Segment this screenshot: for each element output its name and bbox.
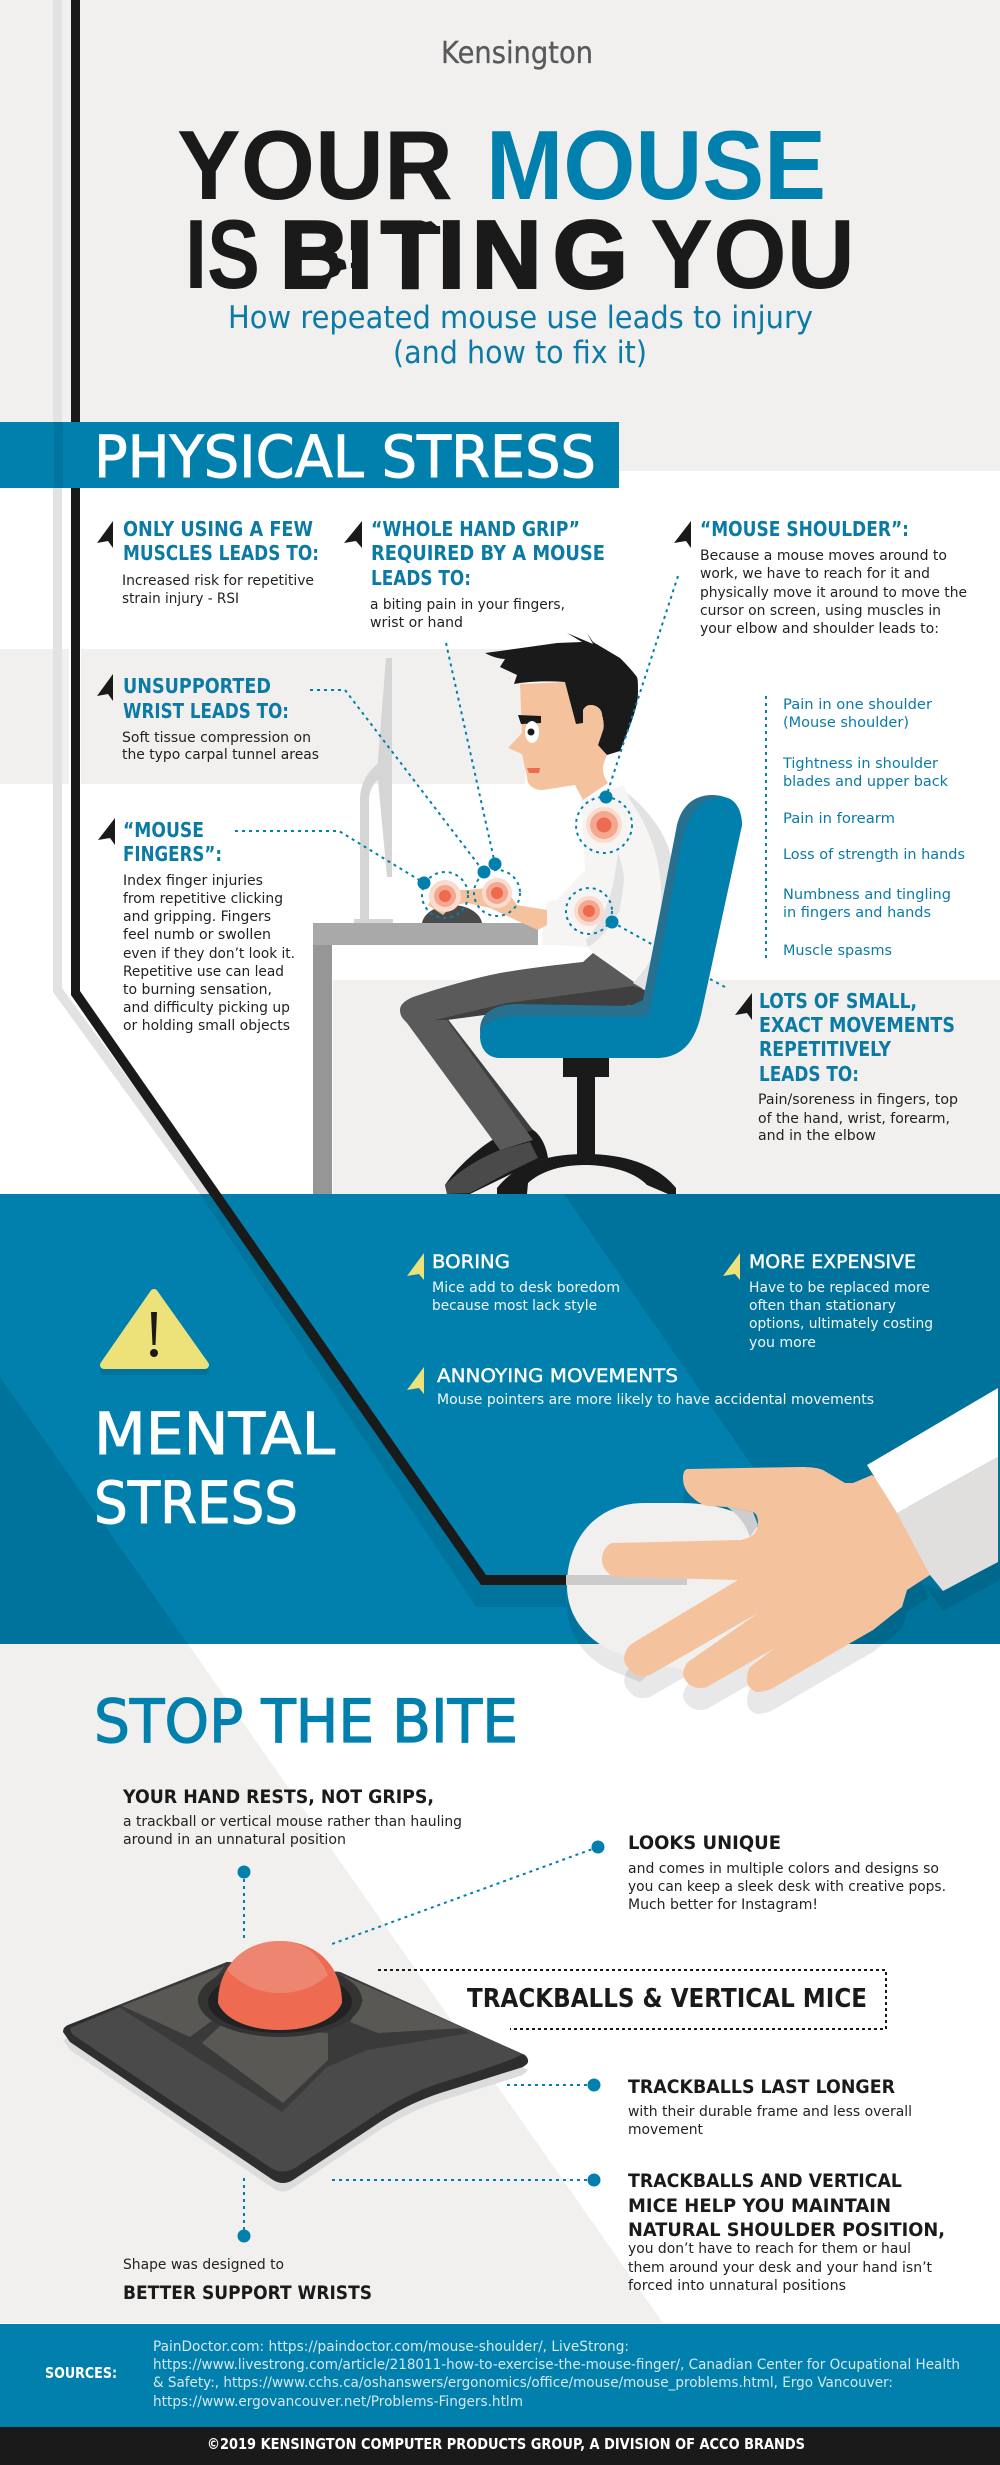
dotted box heading: trackballs and vertical mice: TRACKBALLS & VERTICAL MICE [467,1984,867,2014]
title [177,110,855,309]
note: better support wrists: BETTER SUPPORT WRISTS [123,2282,372,2304]
callout: mouse fingers [98,818,295,1034]
grey accent line [53,0,213,1194]
callout connector lines [235,576,766,987]
callout: only using a few muscles: Increased risk for repetitive [122,573,314,589]
sources panel: https://www.ergovancouver.net/Problems-Fingers.htlm [153,2394,523,2410]
note: natural shoulder position: you don’t have to reach for them or haul [628,2241,911,2257]
note: hand rests: a trackball or vertical mouse rather than hauling [123,1814,462,1830]
connector: looks unique [332,1840,604,1944]
item: boring: BORING [432,1251,510,1273]
callout: only using a few muscles: ONLY USING A FEW [123,517,313,541]
callout: lots of small movements: EXACT MOVEMENTS [759,1013,955,1037]
connector: trackballs last longer [505,2078,600,2092]
mental stress panel background [0,1194,1000,1644]
title: IS [185,199,260,309]
sleeve [867,1388,998,1513]
callout: mouse fingers: Index finger injuries [123,873,263,889]
callout: mouse fingers: and gripping. Fingers [123,909,271,925]
callout: mouse shoulder: cursor on screen, using muscles in [700,603,941,619]
grey band behind chair [333,980,1000,1194]
callout: mouse fingers: feel numb or swollen [123,927,271,943]
symptom list: blades and upper back [783,774,949,790]
seated person [400,633,672,1194]
sources panel: https://www.livestrong.com/article/218011-how-to-exercise-the-mouse-finger/, Canadian Center for Ocupational Health [153,2357,960,2373]
callout: mouse shoulder: work, we have to reach for it and [700,566,930,582]
callout: whole hand grip: REQUIRED BY A MOUSE [371,541,605,565]
callout: mouse fingers: even if they don’t look it. [123,946,295,962]
callout: mouse shoulder [674,517,967,637]
symptom list: Pain in one shoulder [783,697,932,713]
note: trackballs last longer: with their durable frame and less overall [628,2104,912,2120]
logo: Kensington: Kensington [441,36,593,71]
note: hand rests [122,1786,462,1848]
callout: mouse fingers: from repetitive clicking [123,891,283,907]
computer mouse [567,1503,790,1672]
item: more expensive: often than stationary [749,1298,896,1314]
footer [0,2427,1000,2465]
desk [313,923,538,1194]
note: better support wrists: Shape was designed to [123,2257,284,2273]
item: more expensive [723,1251,933,1351]
callout: unsupported wrist: Soft tissue compression on [122,730,311,746]
mouse on desk [422,905,482,923]
hand [602,1467,945,1692]
sources panel: PainDoctor.com: https://paindoctor.com/mouse-shoulder/, LiveStrong: [153,2339,629,2355]
pain points [422,797,632,934]
banner: physical stress: PHYSICAL STRESS [94,423,596,491]
illustration: trackball [63,1941,528,2192]
item: more expensive: Have to be replaced more [749,1280,930,1296]
item: annoying movements: Mouse pointers are more likely to have accidental movements [437,1392,874,1408]
shirt [542,785,672,990]
symptom list: (Mouse shoulder) [783,715,909,731]
callout: only using a few muscles: MUSCLES LEADS TO: [123,541,319,565]
subtitle: How repeated mouse use leads to injury [228,300,813,336]
note: trackballs last longer [628,2076,912,2138]
callout: unsupported wrist [97,674,319,763]
symptom list: Numbness and tingling [783,887,951,903]
symptom list: in fingers and hands [783,905,931,921]
note: natural shoulder position: them around your desk and your hand isn’t [628,2260,933,2276]
callout: unsupported wrist: the typo carpal tunnel areas [122,747,319,763]
monitor [354,658,393,923]
sources panel: SOURCES: [45,2364,117,2382]
callout: mouse fingers: Repetitive use can lead [123,964,284,980]
callout: mouse shoulder: “MOUSE SHOULDER”: [700,517,909,541]
black guide line [71,0,566,1585]
callout: mouse fingers: or holding small objects [123,1018,290,1034]
sources panel: & Safety:, https://www.cchs.ca/oshanswers/ergonomics/office/mouse/mouse_problems.html, Ergo Vancouver: [153,2375,893,2391]
heading: mental stress: STRESS [94,1469,298,1537]
legs [445,1128,548,1194]
note: natural shoulder position: NATURAL SHOULDER POSITION, [628,2219,945,2241]
heading: mental stress [94,1400,335,1537]
callout: whole hand grip: “WHOLE HAND GRIP” [371,517,580,541]
callout: mouse shoulder: Because a mouse moves around to [700,548,947,564]
callout: lots of small movements: Pain/soreness in fingers, top [758,1092,958,1108]
chair cushion [480,795,742,1058]
subtitle [228,300,813,371]
callout: mouse shoulder: your elbow and shoulder leads to: [700,621,939,637]
shadows [567,1523,760,1682]
note: trackballs last longer: movement [628,2122,704,2138]
grey band behind monitor [0,649,525,784]
heading: stop the bite: STOP THE BITE [94,1687,518,1757]
callout: lots of small movements [735,989,958,1144]
illustration: hand on mouse [566,1388,1000,1714]
callout: lots of small movements: and in the elbow [758,1128,876,1144]
callout: mouse fingers: and difficulty picking up [123,1000,290,1016]
callout: only using a few muscles: strain injury - RSI [122,591,239,607]
note: natural shoulder position [628,2170,945,2294]
callout: mouse fingers: FINGERS”: [123,842,222,866]
stop section background wedge [0,1644,663,2323]
callout: lots of small movements: LOTS OF SMALL, [759,989,917,1013]
note: better support wrists [123,2257,372,2304]
callout: lots of small movements: of the hand, wrist, forearm, [758,1111,950,1127]
note: natural shoulder position: MICE HELP YOU MAINTAIN [628,2195,891,2217]
title: BITING [280,202,628,308]
callout: unsupported wrist: WRIST LEADS TO: [123,699,289,723]
footer: ©2019 KENSINGTON COMPUTER PRODUCTS GROUP, A DIVISION OF ACCO BRANDS [207,2435,805,2453]
title: MOUSE [486,110,826,220]
icon: warning triangle [104,1293,205,1371]
item: more expensive: you more [749,1335,816,1351]
callout: whole hand grip [344,517,605,631]
arm and hand [428,888,547,930]
callout: only using a few muscles [97,517,319,607]
item: annoying movements [407,1365,874,1408]
note: natural shoulder position: forced into unnatural positions [628,2278,846,2294]
callout: whole hand grip: a biting pain in your fingers, [370,597,565,613]
dotted box heading: trackballs and vertical mice [378,1970,886,2029]
head [508,682,608,800]
callout: whole hand grip: LEADS TO: [371,566,471,590]
note: hand rests: YOUR HAND RESTS, NOT GRIPS, [122,1786,434,1808]
item: more expensive: MORE EXPENSIVE [749,1251,916,1273]
symptom list: Pain in forearm [783,811,895,827]
symptom list: Loss of strength in hands [783,847,965,863]
chair [497,1058,676,1194]
connector: hand rests [238,1866,250,1942]
item: more expensive: options, ultimately costing [749,1316,933,1332]
callout dots [418,790,618,928]
callout: whole hand grip: wrist or hand [370,615,463,631]
note: looks unique: and comes in multiple colors and designs so [628,1861,939,1877]
callout: lots of small movements: LEADS TO: [759,1062,859,1086]
callout: unsupported wrist: UNSUPPORTED [123,674,271,698]
symptom list: Muscle spasms [783,943,892,959]
callout: mouse fingers: “MOUSE [123,818,204,842]
note: hand rests: around in an unnatural position [123,1832,346,1848]
symptom list [782,697,965,959]
item: annoying movements: ANNOYING MOVEMENTS [437,1365,678,1387]
note: looks unique: Much better for Instagram! [628,1897,818,1913]
callout: mouse shoulder: physically move it around to move the [700,585,967,601]
item: boring [407,1251,620,1314]
note: natural shoulder position: TRACKBALLS AND VERTICAL [628,2170,902,2192]
note: trackballs last longer: TRACKBALLS LAST LONGER [628,2076,895,2098]
title: YOUR [177,110,453,220]
symptom list: Tightness in shoulder [782,756,938,772]
note: looks unique [628,1832,946,1913]
subtitle: (and how to fix it) [393,335,647,371]
item: boring: because most lack style [432,1298,597,1314]
title: YOU [650,199,855,309]
callout: lots of small movements: REPETITIVELY [759,1037,891,1061]
note: looks unique: LOOKS UNIQUE [628,1832,781,1854]
heading: mental stress: MENTAL [94,1400,335,1468]
sources panel [0,2324,1000,2427]
connector: wrists [238,2178,250,2242]
callout: mouse fingers: to burning sensation, [123,982,272,998]
note: looks unique: you can keep a sleek desk with creative pops. [628,1879,946,1895]
item: boring: Mice add to desk boredom [432,1280,620,1296]
header background [0,0,1000,471]
connector: shoulder position [332,2174,600,2186]
